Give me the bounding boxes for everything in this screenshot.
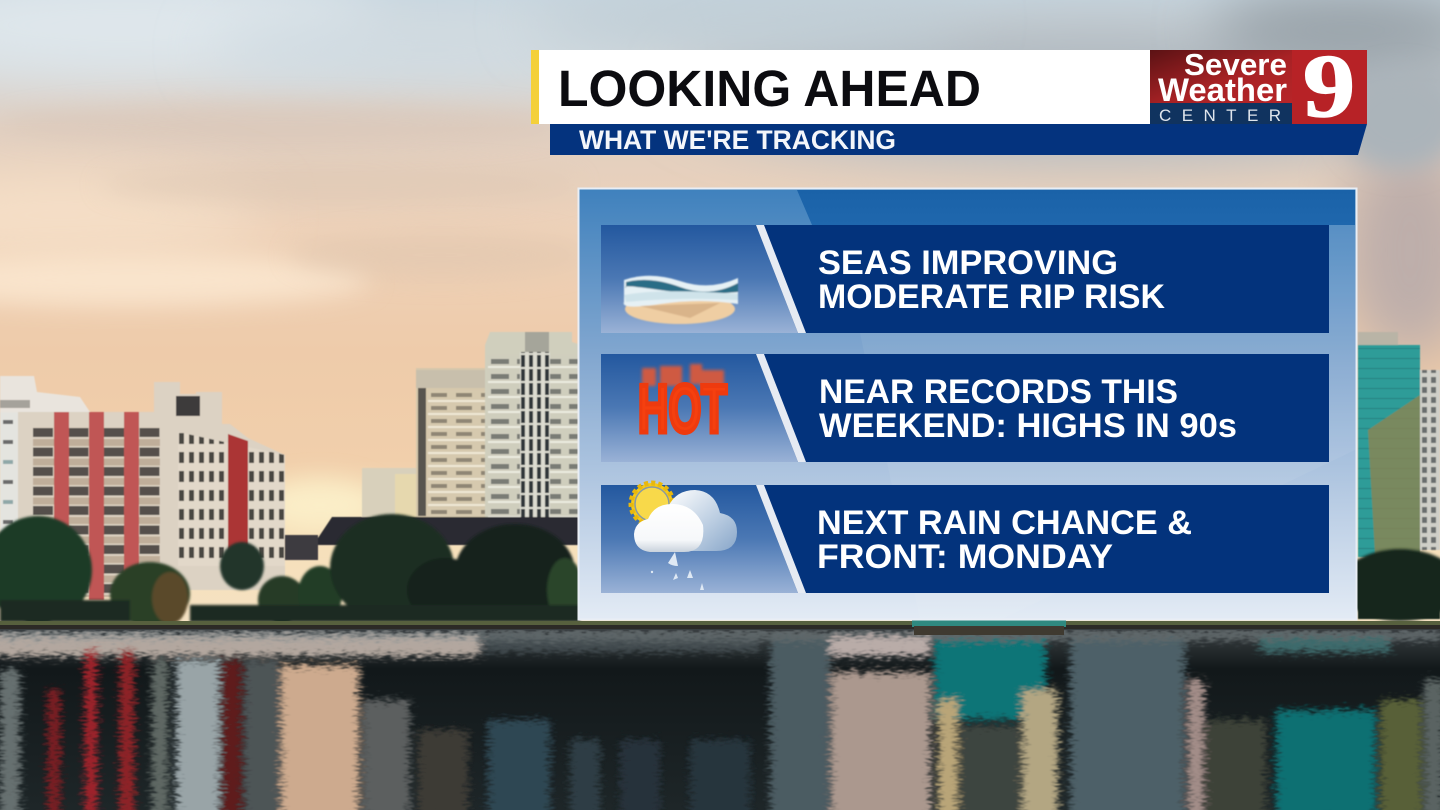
header	[531, 37, 1367, 155]
left buildings	[0, 376, 285, 600]
title: LOOKING AHEAD	[558, 60, 981, 117]
logo: Severe Weather Center 9: CENTER	[1159, 106, 1281, 125]
clouds	[0, 0, 1440, 530]
row: heat	[601, 354, 1329, 462]
logo: Severe Weather Center 9: Weather	[1158, 72, 1287, 108]
row text: MODERATE RIP RISK	[818, 278, 1165, 316]
shoreline	[0, 621, 1440, 630]
row text: NEAR RECORDS THIS	[819, 373, 1178, 411]
row text	[818, 244, 1165, 316]
row text: WEEKEND: HIGHS IN 90s	[819, 407, 1237, 445]
left trees	[0, 514, 583, 626]
icon: hot text: HOT	[638, 371, 727, 447]
row text: SEAS IMPROVING	[818, 244, 1118, 282]
accent bar	[531, 50, 539, 124]
icon: beach wave	[624, 276, 738, 324]
row text	[817, 504, 1192, 576]
title box	[539, 50, 1151, 124]
panel: what we're tracking	[578, 188, 1356, 620]
subtitle bar	[550, 124, 1367, 155]
icon: hot text	[638, 364, 727, 447]
dock	[912, 620, 1066, 635]
right buildings	[1340, 332, 1440, 621]
row text: FRONT: MONDAY	[817, 538, 1113, 576]
icon: sun, cloud and rain	[631, 483, 737, 590]
logo: Severe Weather Center 9	[1150, 37, 1367, 136]
row text	[819, 373, 1237, 445]
logo: Severe Weather Center 9: Severe	[1184, 47, 1287, 82]
background: sky	[0, 0, 1440, 640]
logo: Severe Weather Center 9: 9	[1303, 37, 1355, 136]
white building	[0, 376, 90, 535]
subtitle: WHAT WE'RE TRACKING	[579, 125, 896, 155]
row: seas	[601, 225, 1329, 333]
row: rain	[601, 483, 1329, 593]
row text: NEXT RAIN CHANCE &	[817, 504, 1192, 542]
lake with reflections	[0, 629, 1440, 810]
central towers	[285, 332, 578, 560]
hotel with red columns	[18, 382, 285, 600]
